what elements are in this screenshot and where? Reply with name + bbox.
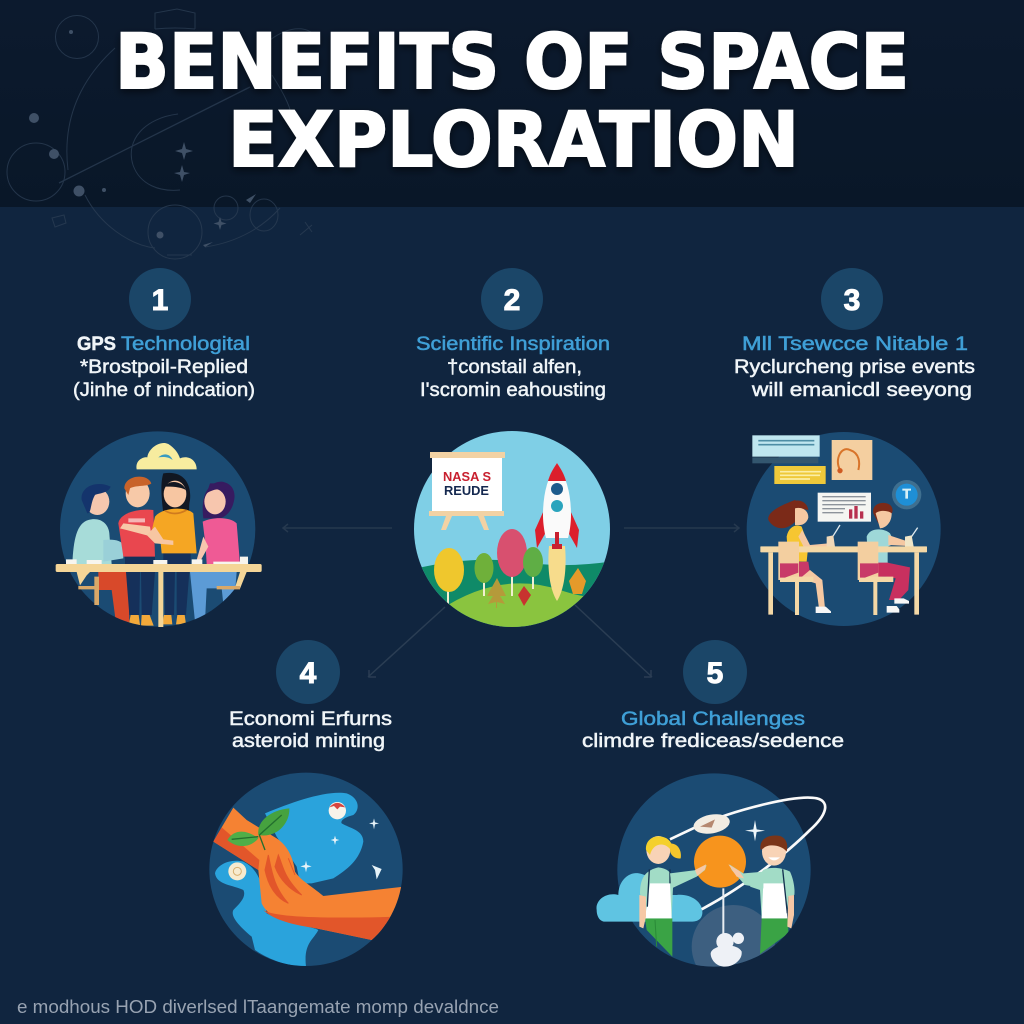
heading 4: Economi Erfurns [229, 709, 392, 730]
number badge 2 [481, 268, 543, 330]
number badge 5: 5 [707, 657, 723, 690]
panel: benefit 3 [734, 268, 975, 626]
number badge 3 [821, 268, 883, 330]
orbit ring [670, 798, 825, 909]
info cards [752, 435, 921, 522]
footer text: e modhous HOD diverlsed lTaangemate momp devaldnce [17, 997, 499, 1017]
number badge 1: 1 [152, 284, 168, 317]
heading 1 [77, 334, 250, 355]
title: BENEFITS OF SPACE [115, 17, 909, 106]
sun sphere [694, 836, 746, 888]
title [115, 17, 909, 184]
illustration: team at a table [56, 431, 262, 627]
description 5: climdre frediceas/sedence [582, 731, 844, 752]
satellite [692, 812, 731, 836]
number badge 3: 3 [844, 284, 860, 317]
panel: benefit 1 [56, 268, 262, 627]
header decorative dots and stars [29, 30, 256, 247]
description 2: †constail alfen, [447, 357, 582, 378]
number badge 5 [683, 640, 747, 704]
seedling leaves [227, 808, 289, 850]
description 1: *Brostpoil-Replied [80, 357, 248, 378]
presentation board: REUDE [444, 484, 489, 498]
arrow: panel 2 to panel 1 [283, 524, 392, 532]
sparkle stars [300, 818, 382, 879]
boy [728, 836, 795, 954]
illustration: rocket and trees [410, 431, 620, 630]
heading 1: GPS [77, 334, 116, 355]
description 3 [734, 357, 975, 401]
heading 2: Scientific Inspiration [416, 334, 610, 355]
illustration: students at a desk [747, 432, 941, 626]
number badge 1 [129, 268, 191, 330]
rocket [535, 463, 579, 601]
number badge 2: 2 [504, 284, 520, 317]
description 1: (Jinhe of nindcation) [73, 380, 255, 401]
arrow: panel 2 to panel 5 [575, 605, 652, 677]
desk and chairs [760, 542, 927, 615]
heading 5: Global Challenges [621, 709, 805, 730]
heading 1: Technologital [121, 334, 250, 355]
header constellation decoration [7, 9, 318, 259]
description 2 [420, 357, 606, 401]
description 1 [73, 357, 255, 401]
number badge 4: 4 [300, 657, 317, 690]
presentation board: NASA S [443, 469, 491, 484]
description 4: asteroid minting [232, 731, 385, 752]
star [745, 820, 765, 841]
student left [768, 500, 840, 613]
panel: benefit 5 [582, 640, 844, 988]
student right [860, 503, 918, 613]
illustration: two people and orbit [597, 773, 825, 988]
header band [0, 0, 1024, 207]
arrow: panel 2 to panel 3 [624, 524, 739, 532]
title: EXPLORATION [228, 95, 799, 184]
presentation board [429, 452, 505, 530]
description 3: Ryclurcheng prise events [734, 357, 975, 378]
panel: benefit 2 [410, 268, 620, 630]
tether and creature [711, 888, 744, 967]
description 2: I'scromin eahousting [420, 380, 606, 401]
number badge 4 [276, 640, 340, 704]
illustration: hand holding seedling [209, 773, 403, 967]
arrow: panel 2 to panel 4 [368, 607, 445, 677]
girl [639, 836, 707, 957]
description 3: will emanicdl seeyong [751, 380, 972, 401]
panel: benefit 4 [209, 640, 403, 967]
cloud [597, 873, 702, 922]
cloud with icon [136, 443, 197, 469]
small globe icons [228, 802, 346, 880]
heading 3: Mll Tsewcce Nitable 1 [742, 334, 968, 355]
